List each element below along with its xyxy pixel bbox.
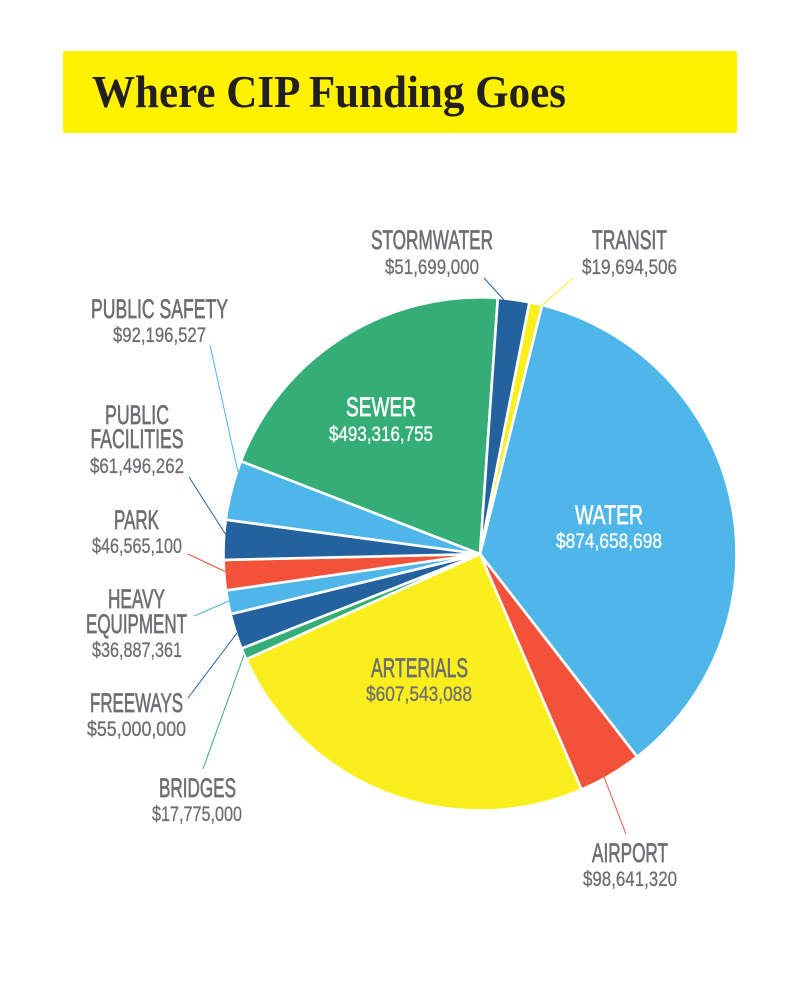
title banner (63, 51, 737, 133)
label: arterials: $607,543,088 (366, 683, 472, 706)
label: airport (583, 838, 677, 891)
label: bridges (152, 773, 242, 826)
label: bridges: BRIDGES (159, 773, 236, 803)
label: arterials: ARTERIALS (371, 653, 468, 683)
pie chart (223, 297, 737, 811)
label: public facilities: $61,496,262 (90, 455, 184, 478)
label: public safety: $92,196,527 (113, 324, 206, 347)
slice: public safety (226, 461, 480, 554)
label: transit: $19,694,506 (582, 256, 677, 279)
label: heavy equipment (86, 584, 187, 662)
leader line: airport (604, 777, 626, 834)
leader line: public safety (210, 345, 238, 472)
label: public facilities: PUBLIC (105, 400, 169, 430)
leader line: bridges (203, 655, 244, 769)
label: stormwater (371, 225, 493, 279)
label: park: PARK (114, 505, 159, 535)
label: airport: AIRPORT (592, 838, 668, 868)
label: freeways: $55,000,000 (87, 718, 186, 741)
slice: bridges (241, 554, 480, 659)
slice: public facilities (223, 520, 480, 560)
label: park: $46,565,100 (92, 535, 182, 558)
slice: freeways (231, 554, 480, 649)
slice: sewer (241, 297, 498, 554)
leader line: heavy equipment (194, 601, 229, 616)
label: sewer: $493,316,755 (329, 423, 433, 446)
label: public facilities: FACILITIES (90, 424, 184, 454)
slice: airport (480, 554, 637, 790)
label: water (556, 500, 662, 553)
label: sewer (329, 392, 433, 446)
title banner: Where CIP Funding Goes (92, 66, 566, 117)
slice: transit (480, 302, 542, 554)
label: stormwater: STORMWATER (371, 225, 493, 255)
slice: heavy equipment (226, 554, 480, 614)
label: stormwater: $51,699,000 (385, 256, 479, 279)
label: water: WATER (575, 500, 643, 530)
slice: park (224, 554, 480, 590)
slice: water (480, 305, 737, 757)
label: airport: $98,641,320 (583, 868, 677, 891)
leader line: transit (540, 278, 573, 307)
leader line: public facilities (189, 477, 226, 535)
label: sewer: SEWER (346, 392, 416, 422)
label: transit (582, 225, 677, 279)
slice: arterials (246, 554, 582, 811)
label: bridges: $17,775,000 (152, 803, 242, 826)
label: transit: TRANSIT (592, 225, 667, 255)
leader line: freeways (188, 633, 237, 698)
leader line: park (188, 554, 226, 572)
label: public safety: PUBLIC SAFETY (91, 294, 228, 324)
label: water: $874,658,698 (556, 530, 662, 553)
leader line: stormwater (484, 278, 504, 300)
label: heavy equipment: $36,887,361 (92, 639, 182, 662)
label: arterials (366, 653, 472, 706)
label: freeways: FREEWAYS (90, 688, 183, 718)
label: public facilities (90, 400, 184, 478)
label: freeways (87, 688, 186, 741)
label: heavy equipment: HEAVY (108, 584, 165, 614)
label: public safety (91, 294, 228, 347)
label: heavy equipment: EQUIPMENT (86, 609, 187, 639)
label: park (92, 505, 182, 558)
slice: stormwater (480, 298, 529, 554)
